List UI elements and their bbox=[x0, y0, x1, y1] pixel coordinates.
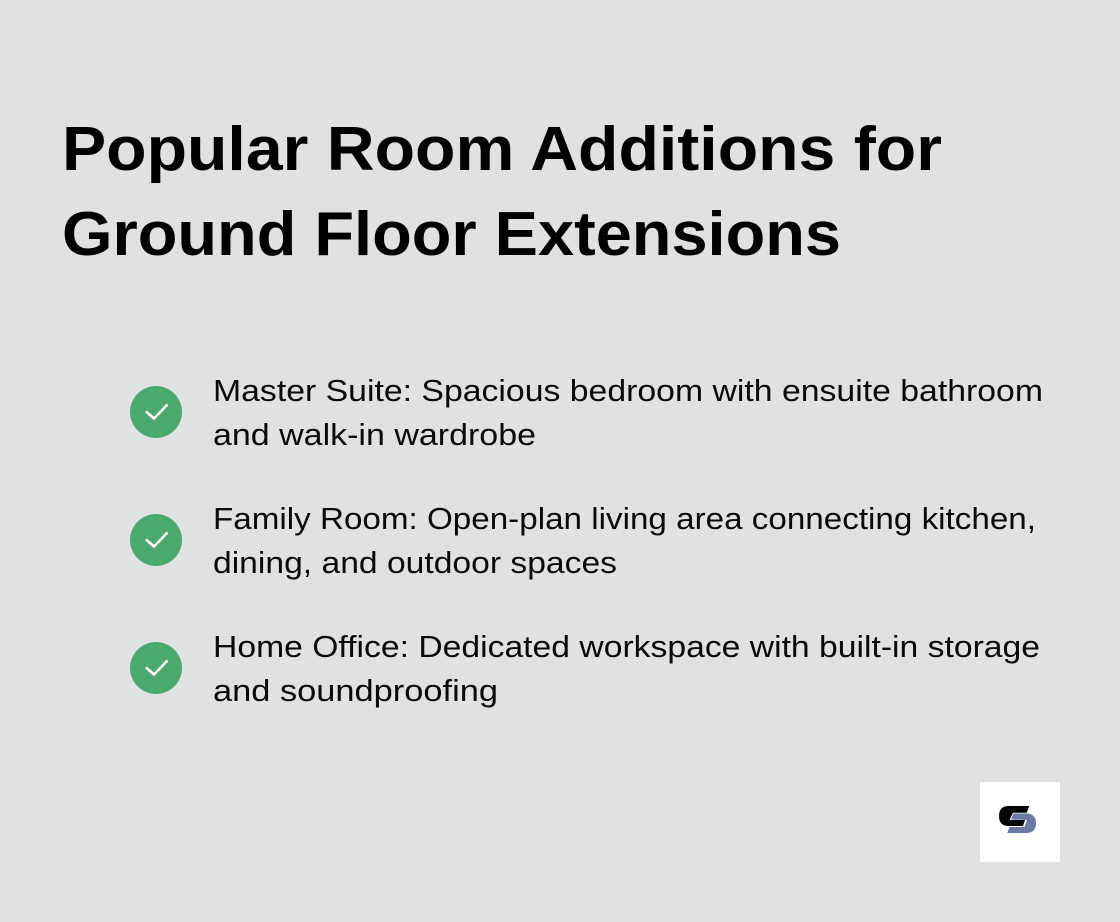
title bbox=[62, 115, 942, 269]
text: family room: Family Room: Open-plan living area connecting kitchen, bbox=[213, 502, 1036, 536]
text: family room: dining, and outdoor spaces bbox=[213, 546, 617, 580]
title: Ground Floor Extensions bbox=[62, 200, 841, 269]
title: Popular Room Additions for bbox=[62, 115, 942, 184]
icon: check circle bbox=[130, 386, 182, 438]
text: home office: and soundproofing bbox=[213, 674, 498, 708]
text: home office: Home Office: Dedicated workspace with built-in storage bbox=[213, 630, 1040, 664]
list item: master suite bbox=[130, 374, 1043, 452]
list item: home office bbox=[130, 630, 1040, 708]
text: family room bbox=[213, 502, 1036, 580]
logo badge bbox=[980, 782, 1060, 862]
icon: check circle bbox=[130, 514, 182, 566]
icon: check circle bbox=[130, 642, 182, 694]
text: master suite: Master Suite: Spacious bedroom with ensuite bathroom bbox=[213, 374, 1043, 408]
text: home office bbox=[213, 630, 1040, 708]
text: master suite: and walk-in wardrobe bbox=[213, 418, 536, 452]
text: master suite bbox=[213, 374, 1043, 452]
list item: family room bbox=[130, 502, 1036, 580]
